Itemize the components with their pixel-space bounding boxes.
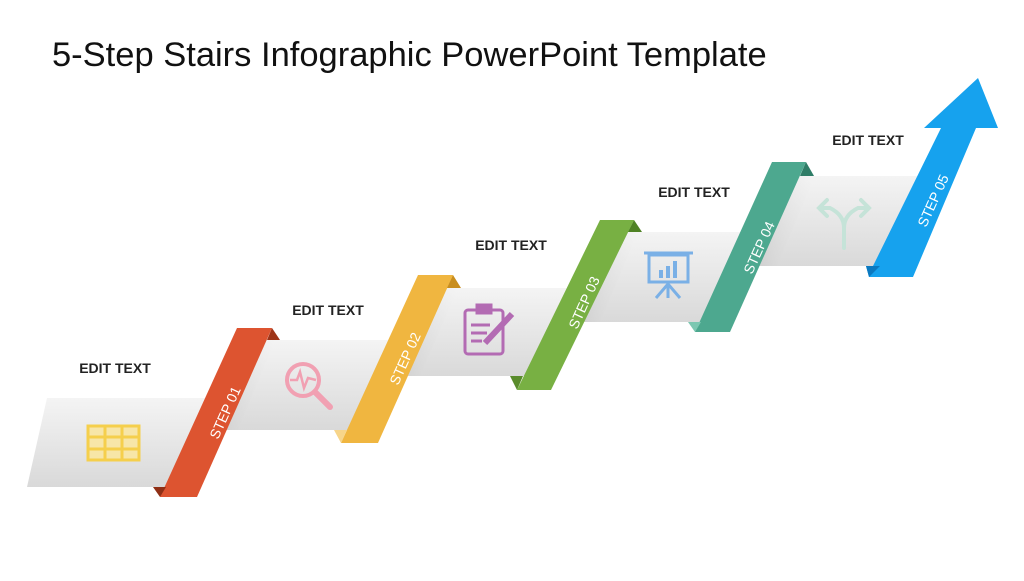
- panel: step 2: [205, 340, 410, 430]
- panel: step 1: [27, 398, 225, 487]
- icon: clipboard pencil: [465, 305, 512, 354]
- ribbon: step 02: STEP 02: [386, 330, 424, 387]
- icon: magnifier pulse: [287, 364, 330, 407]
- panel: step 5: [745, 176, 935, 266]
- label: edit text 5: EDIT TEXT: [832, 132, 904, 148]
- ribbon: step 01: STEP 01: [206, 384, 244, 441]
- icon: split arrows: [819, 200, 869, 248]
- arrow: step 05: STEP 05: [914, 172, 952, 229]
- ribbon: step 04: STEP 04: [740, 219, 778, 276]
- ribbon: step 04: [688, 162, 814, 332]
- label: edit text 2: EDIT TEXT: [292, 302, 364, 318]
- ribbon: step 01: [153, 328, 280, 497]
- ribbon: step 03: STEP 03: [565, 274, 603, 331]
- icon: presentation board: [644, 253, 693, 298]
- label: edit text 1: EDIT TEXT: [79, 360, 151, 376]
- label: edit text 4: EDIT TEXT: [658, 184, 730, 200]
- ribbon: step 02: [334, 275, 461, 443]
- panel: step 3: [388, 288, 585, 376]
- icon: table grid: [88, 426, 139, 460]
- panel: step 4: [568, 232, 758, 322]
- ribbon: step 03: [510, 220, 642, 390]
- label: edit text 3: EDIT TEXT: [475, 237, 547, 253]
- title: 5-Step Stairs Infographic PowerPoint Template: [52, 36, 767, 74]
- arrow: step 05: [866, 78, 998, 277]
